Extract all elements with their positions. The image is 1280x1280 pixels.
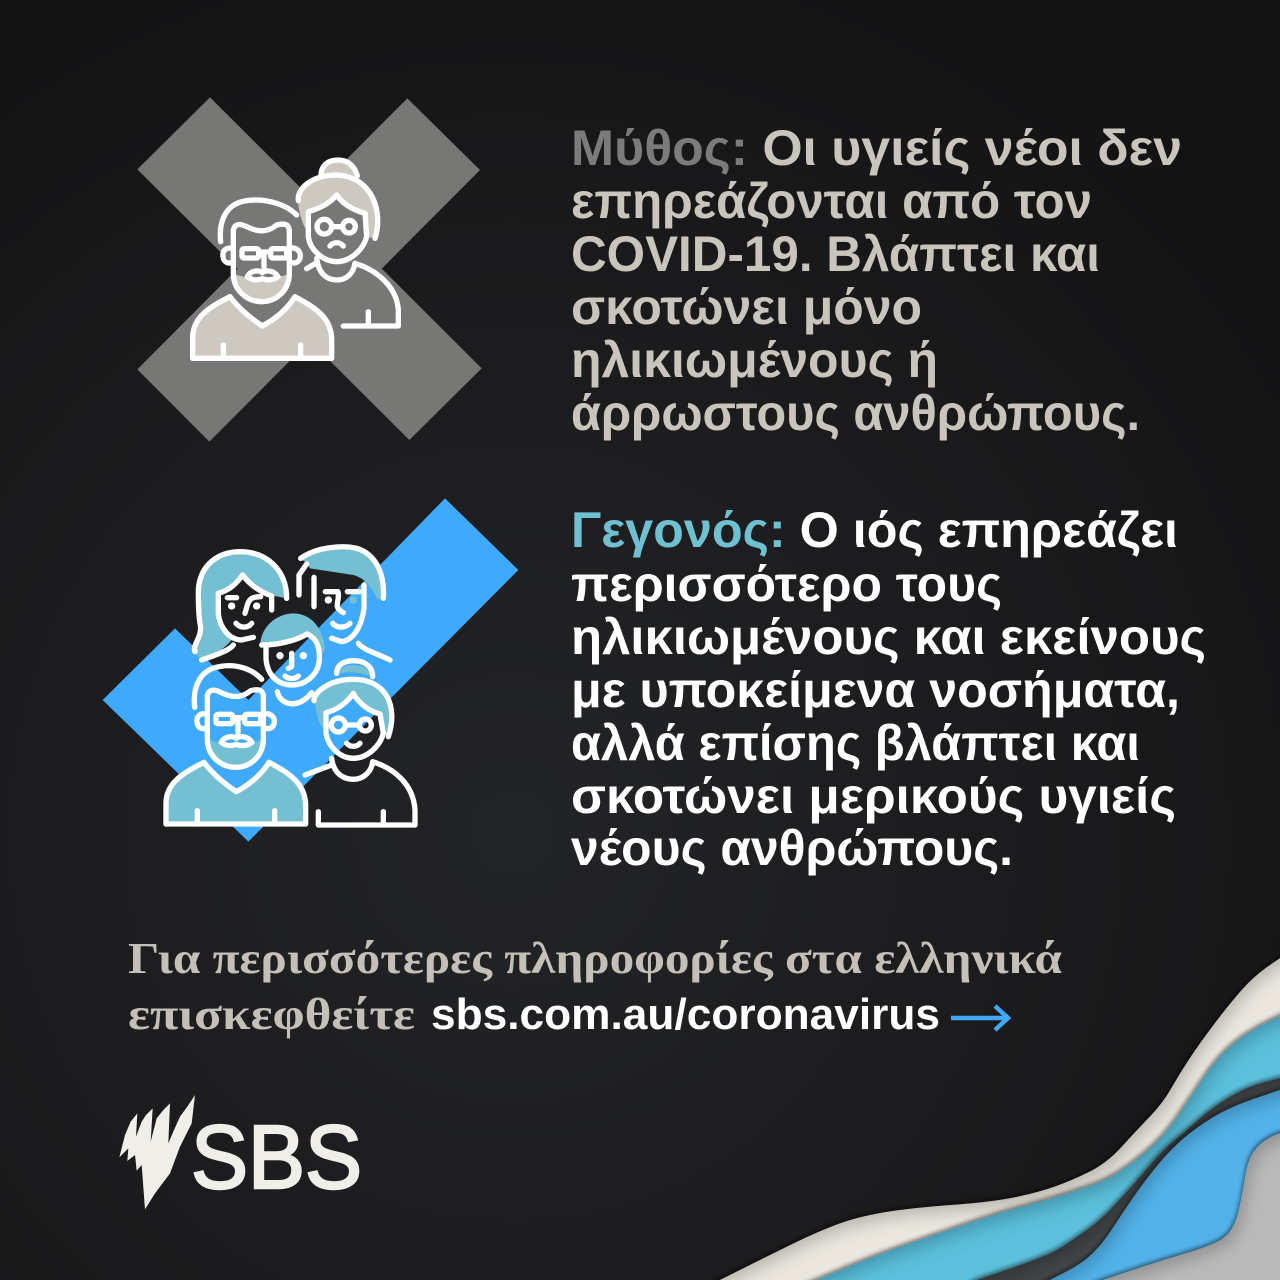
myth heading line: Μύθος: Οι υγιείς νέοι δεν [571, 120, 1182, 176]
footer call to action: επισκεφθείτε [128, 990, 415, 1039]
elderly man figure [193, 200, 332, 358]
fact body lines: περισσότερο τους [571, 556, 1002, 612]
fact body lines: ηλικιωμένους και εκείνους [571, 609, 1206, 665]
footer call to action [128, 934, 1062, 1039]
bearded man figure [166, 666, 306, 824]
icon: grey cross with elderly couple [137, 97, 482, 442]
myth body lines [571, 173, 1140, 441]
blue check mark [103, 498, 518, 842]
fact body lines: με υποκείμενα νοσήματα, [571, 662, 1180, 718]
fact body lines: νέους ανθρώπους. [571, 820, 1013, 876]
myth body lines: ηλικιωμένους ή [571, 332, 938, 388]
text block: myth [571, 120, 1182, 441]
myth body lines: άρρωστους ανθρώπους. [571, 385, 1140, 441]
child in the middle [260, 613, 325, 704]
myth body lines: επηρεάζονται από τον [571, 173, 1092, 229]
fact body lines: σκοτώνει μερικούς υγιείς [571, 768, 1176, 824]
woman with long hair [192, 552, 287, 660]
grandmother figure [305, 661, 415, 825]
fact body lines: αλλά επίσης βλάπτει και [571, 715, 1140, 771]
grey cross mark [137, 97, 482, 442]
fact heading line: Γεγονός: Ο ιός επηρεάζει [571, 502, 1178, 558]
logo mercator mark [119, 1095, 195, 1209]
SBS logo [119, 1095, 362, 1209]
logo wordmark: SBS [191, 1108, 362, 1208]
fact body lines [571, 556, 1206, 876]
footer call to action: Για περισσότερες πληροφορίες στα ελληνικά [128, 934, 1062, 983]
arrow icon [951, 1006, 1008, 1030]
icon: blue tick with group of people [103, 498, 518, 842]
footer call to action: sbs.com.au/coronavirus [431, 990, 940, 1039]
myth body lines: σκοτώνει μόνο [571, 279, 922, 335]
myth body lines: COVID-19. Βλάπτει και [571, 226, 1100, 282]
decorative layered waves [700, 945, 1280, 1280]
elderly woman figure [298, 160, 398, 326]
text block: fact [571, 502, 1206, 876]
man with swept hair [299, 547, 390, 660]
